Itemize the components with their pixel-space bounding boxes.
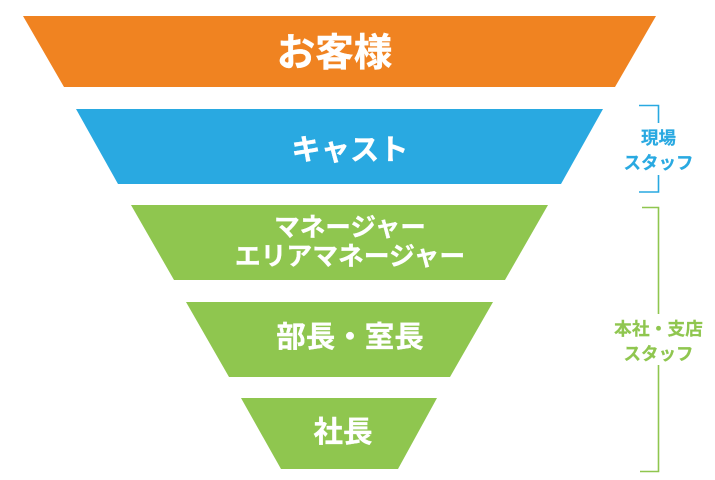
bracket: field staff: 現場 (641, 128, 676, 148)
funnel tier: cast (76, 109, 603, 184)
funnel tier: managers: エリアマネージャー (235, 243, 465, 271)
funnel tier: customers (23, 16, 656, 87)
funnel tier: managers: マネージャー (274, 214, 426, 242)
bracket: head office staff: 本社・支店 (614, 319, 703, 339)
bracket: field staff (624, 106, 694, 192)
funnel tier: president: 社長 (313, 416, 373, 449)
funnel tier: president (241, 398, 437, 469)
bracket: head office staff: スタッフ (624, 344, 694, 364)
funnel tier: managers (131, 205, 548, 280)
funnel tier: customers: お客様 (277, 32, 392, 75)
funnel tier: department heads: 部長・室長 (276, 321, 424, 354)
bracket: head office staff (614, 208, 703, 472)
bracket: field staff: スタッフ (624, 153, 694, 173)
funnel tier: department heads (186, 302, 493, 377)
funnel tier: cast: キャスト (291, 134, 409, 167)
